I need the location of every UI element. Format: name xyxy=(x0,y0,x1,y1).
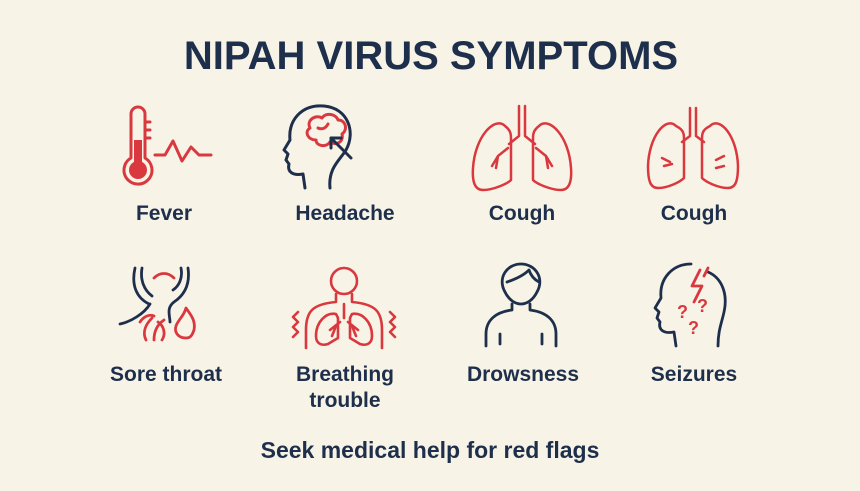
icon: seizures head xyxy=(655,264,725,346)
label: seizures: Seizures xyxy=(651,363,737,386)
icon: lungs cough 2 xyxy=(648,108,738,188)
title: NIPAH VIRUS SYMPTOMS xyxy=(184,34,678,78)
label: cough 1: Cough xyxy=(489,202,555,225)
icon: drowsiness person xyxy=(486,264,556,346)
label: drowsiness: Drowsness xyxy=(467,363,579,386)
icon: thermometer fever xyxy=(124,107,211,184)
icon: head with brain xyxy=(284,106,351,188)
label: headache: Headache xyxy=(295,202,395,225)
footer note: Seek medical help for red flags xyxy=(261,437,599,463)
label: fever: Fever xyxy=(136,202,192,225)
icon: sore throat xyxy=(120,268,194,340)
icon: seizures head: ? xyxy=(688,318,699,338)
icon: breathing trouble xyxy=(293,268,395,348)
icon: seizures head: ? xyxy=(677,302,688,322)
label: cough 2: Cough xyxy=(661,202,727,225)
icon: seizures head: ? xyxy=(697,296,708,316)
label: breathing trouble: Breathing xyxy=(296,363,394,386)
icon: lungs cough 1 xyxy=(473,106,571,190)
label: sore throat: Sore throat xyxy=(110,363,222,386)
text: trouble xyxy=(309,389,381,412)
